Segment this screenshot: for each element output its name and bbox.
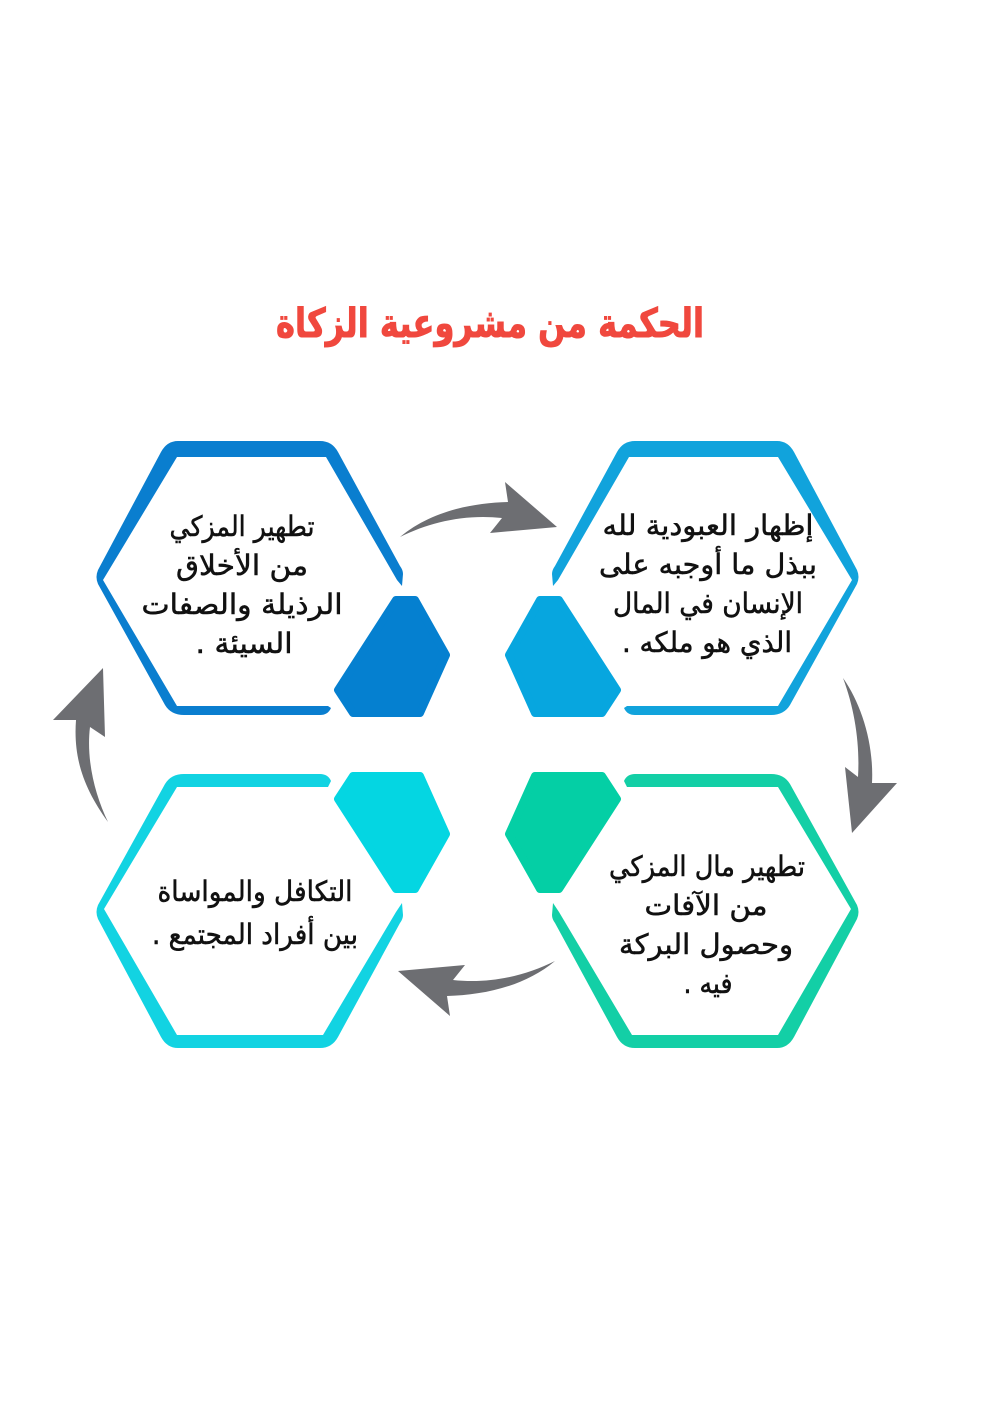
panel: bottom right hexagon — [509, 774, 858, 1048]
panel: top right hexagon — [509, 441, 858, 715]
small hexagon badge — [338, 776, 446, 889]
panel: bottom left hexagon — [96, 774, 446, 1048]
hexagon ring — [552, 441, 858, 715]
text block — [609, 850, 805, 1000]
title: الحكمة من مشروعية الزكاة — [276, 301, 704, 347]
small hexagon badge — [509, 600, 617, 713]
text block: تطهير المزكي — [170, 510, 314, 543]
text block: الإنسان في المال — [613, 587, 803, 620]
hexagon ring — [96, 774, 403, 1048]
small hexagon badge — [338, 600, 446, 713]
hexagon ring — [96, 441, 403, 715]
text block — [599, 509, 817, 659]
arrow: top, pointing right — [400, 482, 557, 537]
text block — [142, 510, 342, 660]
text block: من الأخلاق — [176, 547, 308, 582]
arrow: bottom, pointing left — [398, 961, 555, 1016]
text block: بين أفراد المجتمع . — [152, 915, 358, 951]
text block: إظهار العبودية لله — [602, 509, 814, 542]
text block: الرذيلة والصفات — [142, 588, 342, 621]
arrow: right, pointing down — [843, 678, 897, 833]
arrow: left, pointing up — [53, 668, 108, 822]
text block: تطهير مال المزكي — [609, 850, 805, 883]
text block: السيئة . — [196, 627, 292, 660]
panel: top left hexagon — [96, 441, 446, 715]
hexagon ring — [552, 774, 858, 1048]
text block — [152, 875, 358, 951]
text block: الذي هو ملكه . — [622, 626, 792, 659]
text block: التكافل والمواساة — [158, 875, 352, 908]
text block: ببذل ما أوجبه على — [599, 545, 817, 581]
text block: فيه . — [684, 967, 732, 1000]
text block: وحصول البركة — [619, 928, 793, 961]
small hexagon badge — [509, 776, 617, 889]
text block: من الآفات — [644, 889, 768, 922]
